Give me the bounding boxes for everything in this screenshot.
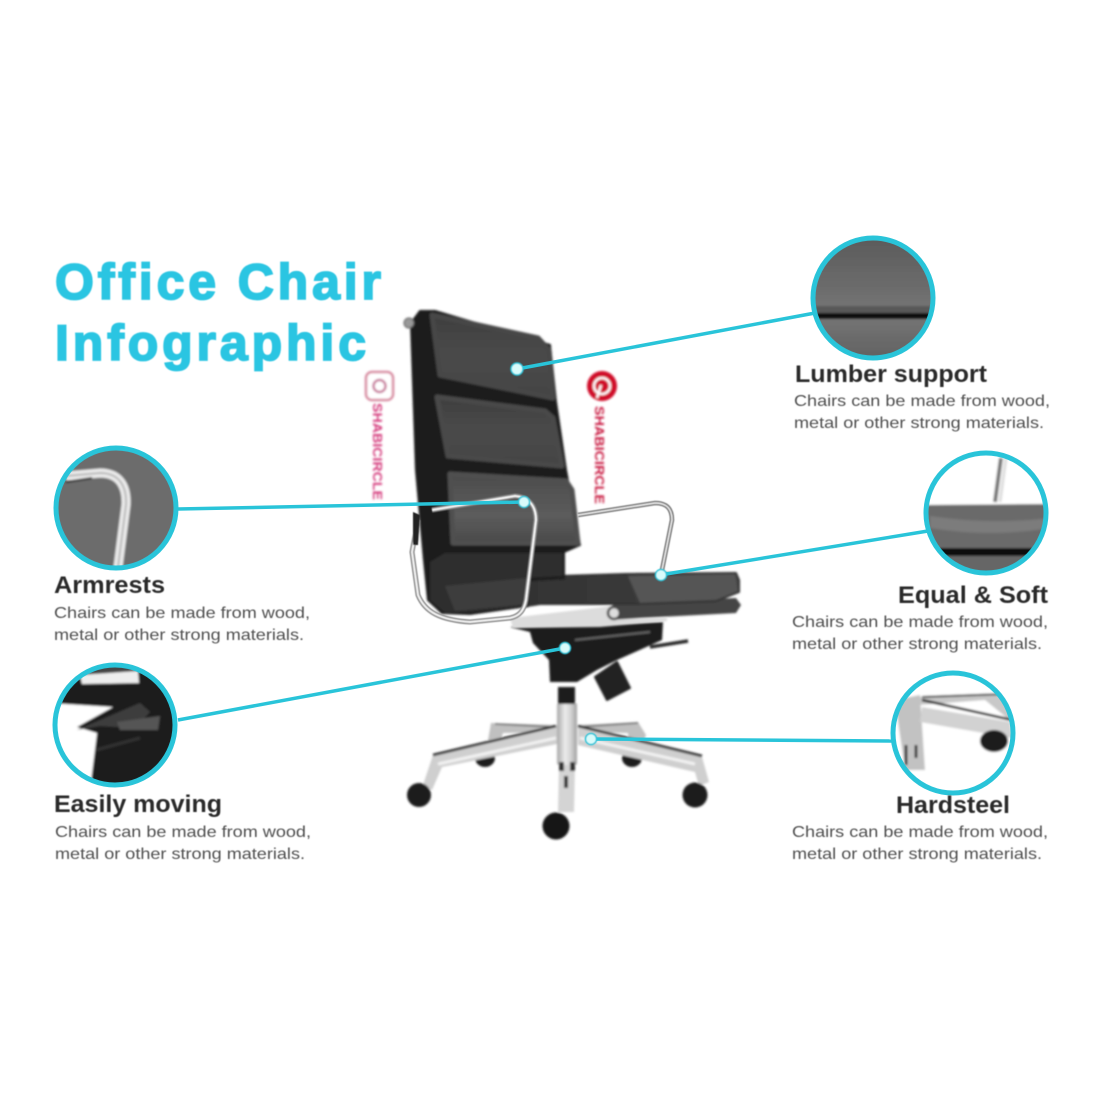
backrest middle pad xyxy=(437,397,562,466)
zoom circle: seat cushion xyxy=(925,452,1050,577)
zoom circle: armrest xyxy=(52,445,180,575)
panel: easily moving xyxy=(50,662,311,863)
gas lift column xyxy=(557,703,577,765)
description xyxy=(794,393,1050,432)
description: metal or other strong materials. xyxy=(54,627,304,644)
panel: lumber support xyxy=(794,235,1050,432)
description: metal or other strong materials. xyxy=(792,846,1042,863)
description: Chairs can be made from wood, xyxy=(794,393,1050,410)
backrest xyxy=(404,311,580,614)
backrest lower pad xyxy=(450,474,578,543)
description: metal or other strong materials. xyxy=(55,846,305,863)
front leg xyxy=(558,765,575,812)
lumbar cushion xyxy=(430,553,563,613)
backrest top pad xyxy=(432,315,553,398)
logo: instagram SHABICIRCLE: SHABICIRCLE xyxy=(370,403,384,500)
chair illustration xyxy=(404,311,741,840)
logo: instagram SHABICIRCLE xyxy=(366,372,393,500)
panel: hardsteel xyxy=(792,670,1048,863)
tilt mechanism xyxy=(510,622,688,700)
star legs xyxy=(423,725,557,790)
description: metal or other strong materials. xyxy=(792,636,1042,653)
zoom circle: steel base xyxy=(890,670,1016,796)
chair base xyxy=(407,687,709,840)
description: Chairs can be made from wood, xyxy=(792,824,1048,841)
infographic canvas xyxy=(52,236,1050,864)
heading: Armrests xyxy=(54,572,165,599)
callout connector lines xyxy=(178,313,928,741)
heading: Hardsteel xyxy=(896,792,1010,819)
armrests xyxy=(412,496,672,622)
description xyxy=(54,605,310,644)
logo: pinterest SHABICIRCLE: SHABICIRCLE xyxy=(592,406,607,504)
description xyxy=(792,824,1048,863)
zoom circle: back cushion seam xyxy=(810,235,936,365)
description xyxy=(55,824,311,863)
zoom circle: tilt mechanism xyxy=(50,662,178,790)
casters xyxy=(407,783,431,807)
back casters xyxy=(475,749,642,767)
title: Infographic xyxy=(55,315,366,371)
seat xyxy=(510,573,741,628)
callout anchor dots xyxy=(511,363,666,744)
panel: equal and soft xyxy=(792,452,1050,653)
logo: pinterest SHABICIRCLE xyxy=(587,371,617,504)
panel: armrests xyxy=(52,445,310,644)
description: Chairs can be made from wood, xyxy=(55,824,311,841)
description: Chairs can be made from wood, xyxy=(54,605,310,622)
description: metal or other strong materials. xyxy=(794,415,1044,432)
description: Chairs can be made from wood, xyxy=(792,614,1048,631)
heading: Easily moving xyxy=(54,791,222,818)
heading: Lumber support xyxy=(795,361,987,388)
description xyxy=(792,614,1048,653)
title: Office Chair xyxy=(55,254,381,310)
title xyxy=(55,254,381,371)
heading: Equal & Soft xyxy=(898,582,1048,609)
